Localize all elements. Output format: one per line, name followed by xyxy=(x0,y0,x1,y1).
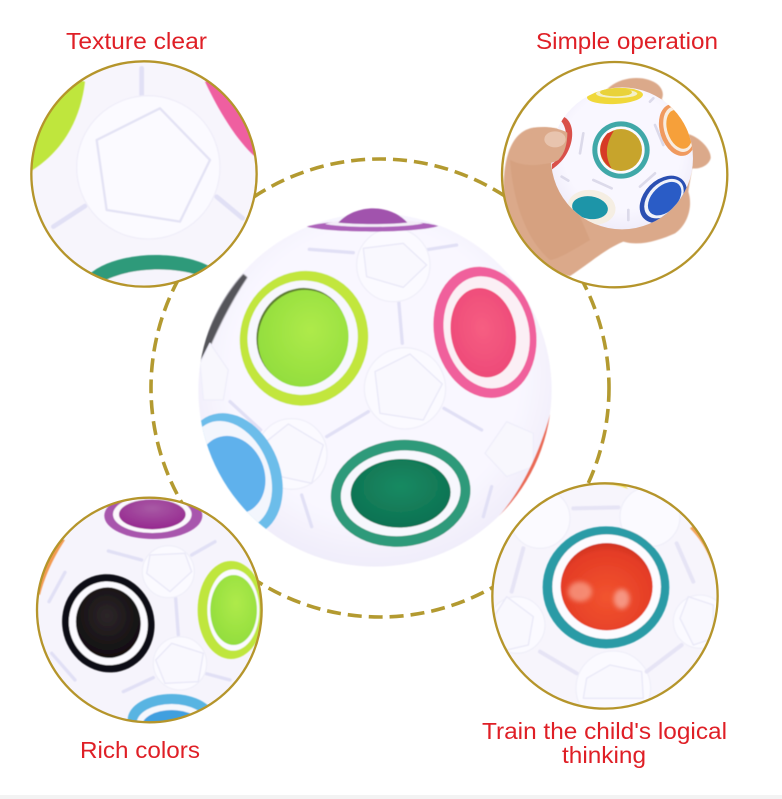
green hole xyxy=(198,561,264,659)
dashed ring connecting the detail circles xyxy=(151,159,609,617)
detail circle: texture clear xyxy=(30,60,258,288)
panel grooves xyxy=(230,245,492,527)
circle border xyxy=(502,62,727,287)
detail circle: hand holding ball xyxy=(502,62,727,287)
small ball xyxy=(551,87,693,229)
yellow sliver xyxy=(570,484,628,490)
pentagons xyxy=(146,553,206,684)
lime green hole xyxy=(239,270,369,406)
pink hole xyxy=(432,266,538,398)
circle border xyxy=(492,483,718,709)
label: simple operation: Simple operation xyxy=(536,28,718,54)
blue hole xyxy=(128,694,216,746)
dark green hole xyxy=(330,439,472,548)
teal-blue hole xyxy=(568,190,616,224)
pentagons xyxy=(200,243,442,484)
label: train logical thinking xyxy=(482,718,727,768)
label: texture clear: Texture clear xyxy=(66,28,207,54)
teal hole xyxy=(592,121,650,179)
orange sliver xyxy=(39,539,66,596)
grooves xyxy=(53,68,243,227)
black hole xyxy=(61,573,156,674)
grooves xyxy=(512,507,693,673)
grooves xyxy=(562,98,663,220)
highlights xyxy=(568,582,592,602)
circle border xyxy=(31,61,257,287)
label: rich colors: Rich colors xyxy=(80,737,200,763)
large pentagon xyxy=(96,96,211,222)
detail circle: rich colors xyxy=(36,496,263,724)
detail circle: red ball xyxy=(491,482,719,710)
blue hole xyxy=(200,412,284,530)
page bottom strip xyxy=(0,795,782,799)
purple hole xyxy=(104,499,203,540)
pentagons xyxy=(495,528,714,698)
orange sliver xyxy=(690,515,733,578)
label: train logical thinking: thinking xyxy=(562,742,646,768)
pink ring section xyxy=(205,70,273,157)
blue hole xyxy=(640,176,686,223)
ball body xyxy=(198,213,552,567)
hand xyxy=(504,78,711,276)
red sliver on right xyxy=(500,415,550,515)
circle border xyxy=(37,498,262,722)
main rainbow ball xyxy=(166,208,553,567)
orange hole xyxy=(658,104,692,156)
grooves xyxy=(49,542,230,692)
green ring section xyxy=(88,255,210,303)
dark sliver on left edge xyxy=(199,274,247,363)
purple hole at top xyxy=(307,208,438,232)
label: train logical thinking: Train the child's logical xyxy=(482,718,727,744)
red hole xyxy=(552,116,572,169)
teal hole with red ball xyxy=(543,526,669,648)
lime ring section xyxy=(32,80,86,171)
yellow hole xyxy=(587,88,643,104)
thumb over ball xyxy=(534,127,568,163)
